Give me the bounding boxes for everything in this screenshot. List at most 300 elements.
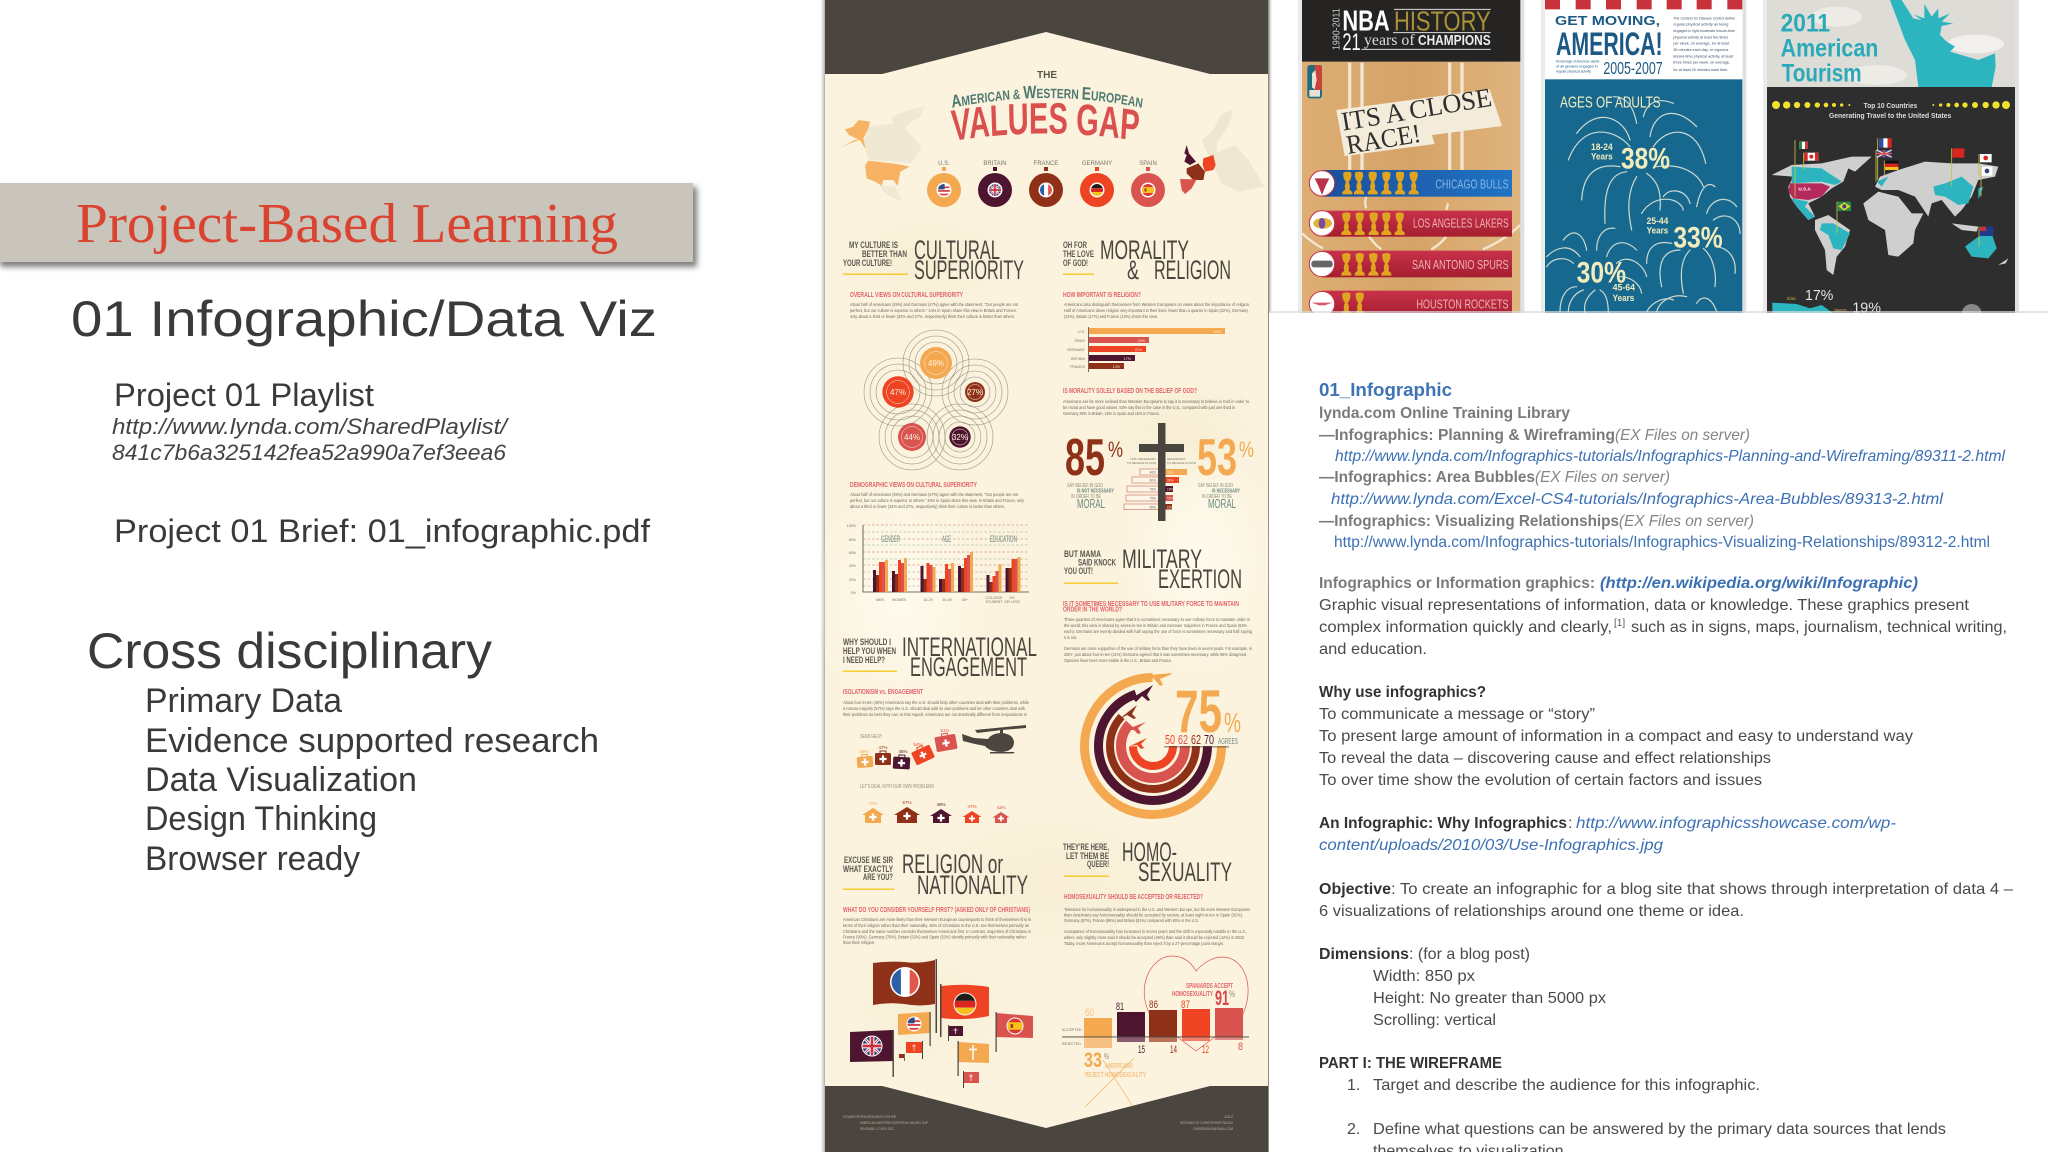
chart: demographic bars: 30-49 (942, 598, 952, 602)
chart: flags (850, 959, 1033, 1088)
acceptance text: Tolerance for homosexuality is widespread in the U.S. and Western Europe, but far more Western Europeans (1064, 907, 1251, 912)
religion text: (21%), Britain (17%) and France (13%) share this view (1064, 314, 1158, 319)
kicker (843, 637, 897, 672)
chart: heart and acceptance bars: 81 (1116, 1001, 1124, 1013)
age statistics: 25-44 (1647, 216, 1669, 226)
heading: project name: 01 Infographic/Data Viz (71, 291, 657, 347)
chart: own problems houses (860, 784, 1010, 823)
country legend (927, 161, 1165, 207)
stat: 75 percent: % (1224, 707, 1241, 738)
heading: MILITARY (1122, 544, 1202, 574)
definition block: Graphic visual representations of information, data or knowledge. These graphics present (1319, 597, 1970, 614)
chart: demographic bars: 80% (849, 538, 857, 542)
intro text column: leisure-time physical activity, at least (1673, 53, 1734, 58)
country legend: U.S. (938, 161, 950, 167)
stat: 53 percent: IN ORDER TO BE (1202, 494, 1232, 500)
example link block (1319, 815, 1896, 854)
chart: heart and acceptance bars: 15 (1138, 1044, 1145, 1056)
links block: http://www.lynda.com/Infographics-tutorials/Infographics-Planning-and-Wireframing/89311-2.html (1335, 448, 2005, 465)
stat: 85 percent: IS NOT NECESSARY (1077, 488, 1114, 494)
chart: send help medkits: 51% (940, 728, 950, 733)
age statistics: AGES OF ADULTS (1560, 94, 1661, 111)
definition block (1319, 575, 2007, 658)
military text: the world; this view is shared by seven-in-ten in Britain and narrower majorities in France and Spain (62% (1064, 623, 1247, 628)
chart: demographic bars (847, 524, 1029, 604)
chart: heart and acceptance bars: 60 (1085, 1007, 1094, 1019)
map: north america (841, 107, 925, 202)
map: europe (1180, 110, 1264, 194)
dimensions block: Scrolling: vertical (1373, 1012, 1496, 1029)
discipline list: Design Thinking (145, 800, 377, 838)
stat: 53 percent: % (1239, 437, 1254, 462)
kicker (1063, 842, 1109, 877)
heading (1781, 11, 1878, 88)
chart: own problems houses: 57% (902, 800, 912, 805)
chart: heart and acceptance bars: SPANIARDS ACCEPT (1186, 983, 1233, 990)
morality text (1063, 386, 1249, 416)
heading: regular physical activity (1556, 69, 1591, 73)
wireframe block: Target and describe the audience for this infographic. (1373, 1077, 1760, 1094)
stat: 33 percent reject: % (1104, 1052, 1109, 1061)
chart: cross with opposing bars: 39% (1167, 478, 1174, 482)
heading: NATIONALITY (917, 870, 1028, 900)
heading (914, 235, 1024, 285)
stat: 75 percent: 75 (1175, 678, 1222, 745)
chart: demographic bars: 100% (847, 524, 857, 528)
chart: send help medkits: 45% (898, 749, 908, 754)
heading (902, 849, 1028, 900)
kicker: QUEER! (1087, 859, 1109, 870)
team bar: Los Angeles Lakers (1309, 211, 1512, 237)
heading: Tourism (1782, 61, 1862, 88)
chart: demographic bars: STUDENT (986, 600, 1003, 604)
objective block: : To create an infographic for a blog site that shows through interpretation of data 4 – (1391, 881, 2013, 898)
stat: 33 percent reject: 33 (1084, 1049, 1102, 1072)
dotted divider and subtitle (1772, 101, 2010, 120)
links block: http://www.lynda.com/Infographics-tutorials/Infographics-Visualizing-Relationships/89312-2.html (1334, 534, 1990, 551)
country legend: SPAIN (1139, 161, 1157, 167)
military text: each). Germans are evenly divided with half saying the use of force is sometimes necessary and half saying (1064, 629, 1252, 634)
kicker: HELP YOU WHEN (843, 646, 896, 657)
links block: (EX Files on server) (1535, 469, 1670, 486)
stat: 53 percent: 53 (1197, 429, 1237, 487)
chart: rifle rings (1084, 673, 1241, 814)
chart: send help medkits: 39% (859, 749, 869, 754)
definition block: and education. (1319, 641, 1427, 658)
example link block: : (1568, 815, 1572, 832)
age statistics: Years (1613, 293, 1634, 303)
playlist block: 841c7b6a325142fea52a990a7ef3eea6 (112, 440, 507, 465)
chart: demographic bars: 40% (849, 564, 857, 568)
section: military exertion (1063, 544, 1252, 814)
chart: cross with opposing bars: NOT NECESSARY (1130, 457, 1156, 461)
overview text (850, 290, 1019, 319)
chart: send help medkits (856, 728, 958, 769)
chart: importance of religion bars: 21% (1135, 348, 1143, 352)
chart: demographic bars: HS (1010, 596, 1015, 600)
NBA header: HISTORY (1394, 6, 1491, 37)
demographic text: About half of Americans (49%) and Germans (47%) agree with the statement, "Our people are not (850, 492, 1019, 497)
why use infographics block: To present large amount of information in a compact and easy to understand way (1319, 728, 1913, 745)
heading: GET MOVING, (1555, 13, 1660, 28)
heading: AMERICA! (1556, 26, 1663, 62)
chart: importance of religion bars: GERMANY (1067, 348, 1086, 352)
chart: cross with opposing bars: 46% (1150, 470, 1156, 474)
intro text column: three times per week, on average, (1673, 60, 1730, 65)
chart: cross with opposing bars: 75% (1150, 488, 1156, 492)
NBA header: years of (1364, 32, 1416, 49)
section: international engagement (843, 632, 1037, 823)
why use infographics block: To communicate a message or “story” (1319, 706, 1595, 723)
thumbnail: American Tourism infographic (1763, 0, 2019, 324)
country legend: BRITAIN (983, 161, 1007, 167)
title (950, 70, 1143, 140)
nationality text: Christians and the same number consider themselves Americans first. In contrast, majorities of Christians in (843, 929, 1031, 934)
kicker: ARE YOU? (863, 872, 893, 883)
links block: —Infographics: Planning & Wireframing (1319, 427, 1615, 444)
chart: cross with opposing bars: 19% (1167, 496, 1174, 500)
chart: concentric target circles: 27% (967, 388, 983, 397)
chart: heart and acceptance bars: % (1229, 989, 1235, 999)
chart: cross with opposing bars: TO BELIEVE IN GOD (1127, 461, 1157, 465)
nationality text (843, 905, 1031, 945)
kicker: OF GOD! (1063, 258, 1088, 269)
title banner: Project-Based Learning (76, 193, 618, 255)
kicker: LET THEM BE (1066, 851, 1109, 862)
objective block: Objective (1319, 881, 1391, 898)
ring legend: AGREES (1218, 737, 1238, 746)
intro text column: for at least 20 minutes each time. (1673, 67, 1728, 72)
chart: cross with opposing bars: 60% (1150, 478, 1156, 482)
footer credits: SOURCE: (843, 1114, 861, 1119)
chart: demographic bars: OR LESS (1004, 600, 1020, 604)
chart: demographic bars: 60% (849, 551, 857, 555)
ring legend (1164, 732, 1238, 747)
kicker: WHY SHOULD I (843, 637, 891, 648)
chart: demographic bars: 0% (851, 591, 857, 595)
morality text: IS MORALITY SOLELY BASED ON THE BELIEF OF GOD? (1063, 386, 1197, 395)
footer credits: AMERICAN-WESTERN EUROPEAN VALUES GAP (860, 1120, 928, 1125)
discipline list: Evidence supported research (145, 722, 599, 760)
intro text column: per week, on average, for at least (1673, 41, 1730, 46)
definition block: [1] (1614, 618, 1625, 629)
morality text: Germany 39% in Britain, 19% in Spain and 15% in France. (1063, 411, 1160, 416)
military text: 2007, just about four-in-ten (41%) Germans agreed that it was sometimes necessary, while 58% disagreed. (1064, 652, 1247, 657)
heading: ENGAGEMENT (910, 652, 1027, 682)
age statistics: 30% (1577, 257, 1626, 290)
playlist block (112, 377, 509, 465)
wireframe block: 2. (1347, 1121, 1360, 1138)
chart: heart and acceptance bars: 8 (1238, 1041, 1243, 1053)
statue of liberty (1890, 0, 1996, 87)
overview text: only about a third or fewer (32% and 27%, respectively) think their culture is better than others. (850, 314, 1015, 319)
kicker (843, 855, 894, 890)
footer credits: RELEASED 17 NOV 2011 (860, 1126, 894, 1131)
definition block: (http://en.wikipedia.org/wiki/Infographic) (1600, 575, 1918, 592)
footer credits: PEW RESEARCH CENTER (860, 1114, 896, 1119)
discipline list (145, 682, 599, 878)
age statistics: Years (1591, 151, 1613, 161)
stat: 85 percent: 85 (1065, 429, 1105, 487)
intro text column (1673, 15, 1736, 72)
chart: heart and acceptance bars (1062, 956, 1249, 1056)
heading (1122, 544, 1242, 594)
chart: importance of religion bars (1067, 327, 1225, 372)
engagement text: their problems as best they can. In this regard, Americans are not drastically different from respondents in (843, 712, 1027, 717)
stat: 85 percent: MORAL (1077, 496, 1105, 511)
engagement text: ISOLATIONISM vs. ENGAGEMENT (843, 687, 923, 696)
chart: cross with opposing bars (1124, 423, 1197, 521)
discipline list: Data Visualization (145, 761, 417, 799)
heading (1122, 837, 1232, 887)
title banner (0, 183, 697, 267)
military text: IS IT SOMETIMES NECESSARY TO USE MILITARY FORCE TO MAINTAIN (1063, 599, 1239, 608)
bottom chevron band (825, 1086, 1268, 1152)
heading: CULTURAL (914, 235, 1000, 265)
kicker (1064, 549, 1118, 584)
kicker: EXCUSE ME SIR (844, 855, 893, 866)
military text: it is not. (1064, 635, 1077, 640)
chart: demographic bars: 20% (849, 578, 857, 582)
section: religion or nationality (843, 849, 1033, 1088)
chart: cross with opposing bars: 19% (1167, 488, 1174, 492)
ring legend: 70 (1204, 732, 1214, 747)
kicker: BUT MAMA (1064, 549, 1101, 560)
chart: cross with opposing bars: 53% (1167, 470, 1174, 474)
links block: (EX Files on server) (1615, 427, 1750, 444)
discipline list: Primary Data (145, 682, 342, 720)
nationality text: American Christians are more likely than their Western European counterparts to think of themselves first in (843, 917, 1031, 922)
heading: MORALITY (1100, 235, 1189, 265)
intro text column: The Centers for Disease Control define (1673, 15, 1736, 20)
age statistics: 33% (1673, 221, 1723, 254)
stat: 85 percent: % (1108, 437, 1123, 462)
wireframe block (1319, 1055, 1946, 1152)
demographic text (850, 480, 1025, 509)
chart: demographic bars: COLLEGE (986, 596, 1003, 600)
links block: —Infographics: Area Bubbles (1319, 469, 1535, 486)
dotted divider and subtitle: Generating Travel to the United States (1829, 111, 1951, 120)
morality text: be moral and have good values. 53% say this is the case in the U.S., compared with just one third in (1063, 405, 1235, 410)
age statistics (1560, 94, 1723, 303)
kicker (843, 240, 908, 275)
chart: importance of religion bars: SPAIN (1074, 339, 1085, 343)
team bar: San Antonio Spurs (1309, 251, 1512, 277)
acceptance text: than Americans say homosexuality should be accepted by society, at least eight-in-ten in Spain (91%), (1064, 912, 1243, 918)
team bar: Houston Rockets: HOUSTON ROCKETS (1416, 296, 1509, 311)
engagement text: a narrow majority (57%) says the U.S. should deal with its own problems and let other countries deal with (843, 706, 1025, 711)
chart: concentric target circles: 44% (904, 433, 920, 442)
why use infographics block: To over time show the evolution of certain factors and issues (1319, 772, 1762, 789)
chart: heart and acceptance bars: 12 (1202, 1044, 1209, 1056)
team bar: San Antonio Spurs: SAN ANTONIO SPURS (1412, 257, 1509, 272)
thumbnail: Get Moving America infographic (1541, 0, 1746, 313)
country legend: GERMANY (1082, 161, 1112, 167)
chart: own problems houses: 43% (996, 805, 1006, 810)
religion text: HOW IMPORTANT IS RELIGION? (1063, 290, 1141, 299)
demographic text: about a third or fewer (32% and 27%, respectively) think their culture is better than others. (850, 504, 1005, 509)
heading: Percentage of American adults (1556, 59, 1600, 63)
heading: cross disciplinary: Cross disciplinary (87, 623, 492, 679)
fireworks (1547, 97, 1740, 313)
chart: demographic bars: 18-29 (923, 598, 933, 602)
heading: American (1781, 36, 1878, 63)
chart: heart and acceptance bars: ACCEPTED (1062, 1028, 1082, 1032)
footer credits: CHRISPAGUIO@GMAIL.COM (1193, 1126, 1233, 1131)
links block: lynda.com Online Training Library (1319, 405, 1570, 422)
military text: Germans are more supportive of the use of military force than they have been in recent years. For example, in (1064, 646, 1252, 651)
court lines (1350, 63, 1462, 170)
stat: 85 percent: SAY BELIEF IN GOD (1067, 483, 1103, 489)
definition block: such as in signs, maps, journalism, technical writing, (1631, 619, 2007, 636)
example link block: content/uploads/2010/03/Use-Infographics.jpg (1319, 837, 1663, 854)
discipline list: Browser ready (145, 840, 360, 878)
chart: heart and acceptance bars: 87 (1181, 999, 1190, 1011)
stat: 53 percent: SAY BELIEF IN GOD (1198, 483, 1233, 489)
chart: send help medkits: 47% (878, 745, 888, 750)
dimensions block: Height: No greater than 5000 px (1373, 990, 1606, 1007)
heading: EXERTION (1158, 564, 1242, 594)
arrival statistics: Japan (1833, 307, 1847, 312)
wireframe block: 1. (1347, 1077, 1360, 1094)
demographic text: DEMOGRAPHIC VIEWS ON CULTURAL SUPERIORITY (850, 480, 977, 489)
chart: demographic bars: AGE (942, 534, 951, 544)
section: homosexuality (1062, 837, 1251, 1107)
why use infographics block: Why use infographics? (1319, 684, 1486, 701)
objective block (1319, 881, 2013, 920)
heading: HOMO- (1122, 837, 1177, 867)
why use infographics block: To reveal the data – discovering cause and effect relationships (1319, 750, 1771, 767)
chart: own problems houses: 49% (936, 802, 946, 807)
chart: demographic bars: WOMEN (892, 598, 906, 602)
footer credits: 2012 (1224, 1114, 1233, 1119)
title: THE (1037, 70, 1057, 81)
ring legend: 62 (1191, 732, 1201, 747)
military text: Opinions have been more stable in the U.S., Britain and France. (1064, 658, 1172, 663)
paper slip headline (1336, 82, 1502, 160)
links block: 01_Infographic (1319, 380, 1452, 400)
stat: 85 percent: IN ORDER TO BE (1071, 494, 1101, 500)
NBA header: 21 (1342, 29, 1361, 56)
overview text: OVERALL VIEWS ON CULTURAL SUPERIORITY (850, 290, 963, 299)
acceptance text: Germany (87%), France (86%) and Britain (81%) compared with 60% in the U.S. (1064, 918, 1199, 923)
chart: concentric target circles (864, 330, 1008, 470)
chart: concentric target circles: 47% (890, 388, 906, 397)
NBA header: CHAMPIONS (1418, 33, 1491, 49)
panel: slide left column (0, 183, 697, 878)
section: cultural superiority (843, 235, 1029, 604)
dotted divider and subtitle: Top 10 Countries (1864, 101, 1917, 110)
team bar: Los Angeles Lakers: LOS ANGELES LAKERS (1413, 215, 1509, 230)
chart: send help medkits: SEND HELP! (860, 734, 882, 740)
panel: project brief document (1269, 311, 2048, 1152)
chart: heart and acceptance bars: 91 (1215, 987, 1229, 1010)
wireframe block: Define what questions can be answered by the primary data sources that lends (1373, 1121, 1946, 1138)
chart: importance of religion bars: 13% (1113, 365, 1121, 369)
playlist block: http://www.lynda.com/SharedPlaylist/ (112, 414, 509, 439)
NBA header: NBA (1342, 6, 1390, 38)
definition block: complex information quickly and clearly, (1319, 619, 1612, 636)
engagement text (843, 687, 1029, 717)
ring legend: 62 (1178, 732, 1188, 747)
world map: U.S.A (1798, 187, 1811, 192)
nationality text: France (90%), Germany (70%), Britain (63%) and Spain (53%) identify primarily with their nationality rather (843, 934, 1026, 940)
links block: —Infographics: Visualizing Relationships (1319, 513, 1619, 530)
intro text column: 30 minutes each day; or vigorous (1673, 47, 1728, 52)
chart: importance of religion bars: BRITAIN (1071, 357, 1085, 361)
intro text column: regular physical activity as being (1673, 22, 1728, 27)
thumbnail: NBA history infographic (1298, 0, 1524, 317)
nationality text: WHAT DO YOU CONSIDER YOURSELF FIRST? (ASKED ONLY OF CHRISTIANS) (843, 905, 1030, 914)
brief line: Project 01 Brief: 01_infographic.pdf (114, 513, 650, 549)
heading: 2005-2007 (1603, 58, 1663, 78)
intro text column: engaged in light-moderate leisure-time (1673, 28, 1736, 33)
definition block: Infographics or Information graphics: (1319, 575, 1595, 592)
chart: cross with opposing bars: 15% (1167, 506, 1174, 510)
footer credits (843, 1114, 1233, 1131)
chart: importance of religion bars: U.S. (1078, 330, 1085, 334)
playlist block: Project 01 Playlist (114, 377, 374, 413)
kicker: YOU OUT! (1064, 566, 1093, 577)
objective block: 6 visualizations of relationships around one theme or idea. (1319, 903, 1744, 920)
heading: INTERNATIONAL (902, 632, 1037, 662)
team bar: Houston Rockets (1309, 291, 1512, 317)
panel: values gap infographic (820, 0, 1272, 1152)
team bar: Chicago Bulls: CHICAGO BULLS (1435, 176, 1509, 191)
heading: RELIGION (1154, 255, 1231, 285)
chart: importance of religion bars: 17% (1124, 357, 1132, 361)
chart: heart and acceptance bars: HOMOSEXUALITY (1172, 991, 1213, 998)
icon: NBA logo (1307, 65, 1322, 98)
chart: own problems houses: LET'S DEAL WITH OUR OWN PROBLEMS (860, 784, 935, 790)
kicker: THE LOVE (1063, 249, 1094, 260)
kicker: BETTER THAN (862, 249, 907, 260)
arrival statistics: Britain (1787, 296, 1796, 301)
heading: 2011 (1781, 11, 1830, 38)
title: AMERICAN & WESTERN EUROPEAN (952, 86, 1143, 108)
military text (1063, 599, 1252, 663)
ring legend: 50 (1165, 732, 1175, 747)
kicker: YOUR CULTURE! (843, 258, 892, 269)
age statistics: 38% (1621, 142, 1670, 175)
dimensions block: : (for a blog post) (1409, 946, 1530, 963)
chart: demographic bars: EDUCATION (990, 534, 1017, 544)
demographic text: perfect, but our culture is superior to others." 44% in Spain share this view. In Britain and France, only (850, 498, 1025, 503)
chart: importance of religion bars: 50% (1214, 330, 1222, 334)
links block: http://www.lynda.com/Excel-CS4-tutorials/Infographics-Area-Bubbles/89313-2.html (1331, 491, 1943, 508)
heading: of all genders engaged in (1556, 64, 1598, 68)
chart: demographic bars: MEN (876, 598, 884, 602)
acceptance text: Today, more Americans accept homosexuality than reject it by a 27-percentage point margin. (1064, 941, 1224, 946)
chart: importance of religion bars: FRANCE (1070, 365, 1086, 369)
dimensions block (1319, 946, 1606, 1029)
country legend: FRANCE (1034, 161, 1058, 167)
kicker: WHAT EXACTLY (843, 864, 893, 875)
footer credits: DESIGNED BY CHRISTOPHER PAGUIO (1180, 1120, 1233, 1125)
heading (1555, 13, 1663, 78)
heading: SEXUALITY (1138, 857, 1232, 887)
acceptance text: Acceptance of homosexuality has increased in recent years and the shift is especially notable in the U.S., (1064, 929, 1247, 934)
heading (1100, 235, 1231, 285)
morality text: Americans are far more inclined than Western Europeans to say it is necessary to believe in God in order to (1063, 399, 1249, 404)
chart: importance of religion bars: 22% (1138, 339, 1146, 343)
overview text: perfect, but our culture is superior to others." 44% in Spain share this view in Britain and France, (850, 308, 1017, 313)
dimensions block: Width: 850 px (1373, 968, 1475, 985)
example link block: An Infographic: Why Infographics (1319, 815, 1567, 832)
NBA header (1332, 6, 1491, 56)
nationality text: than their religion (843, 940, 875, 945)
stat: 33 percent reject: REJECT HOMOSEXUALITY (1085, 1072, 1146, 1079)
